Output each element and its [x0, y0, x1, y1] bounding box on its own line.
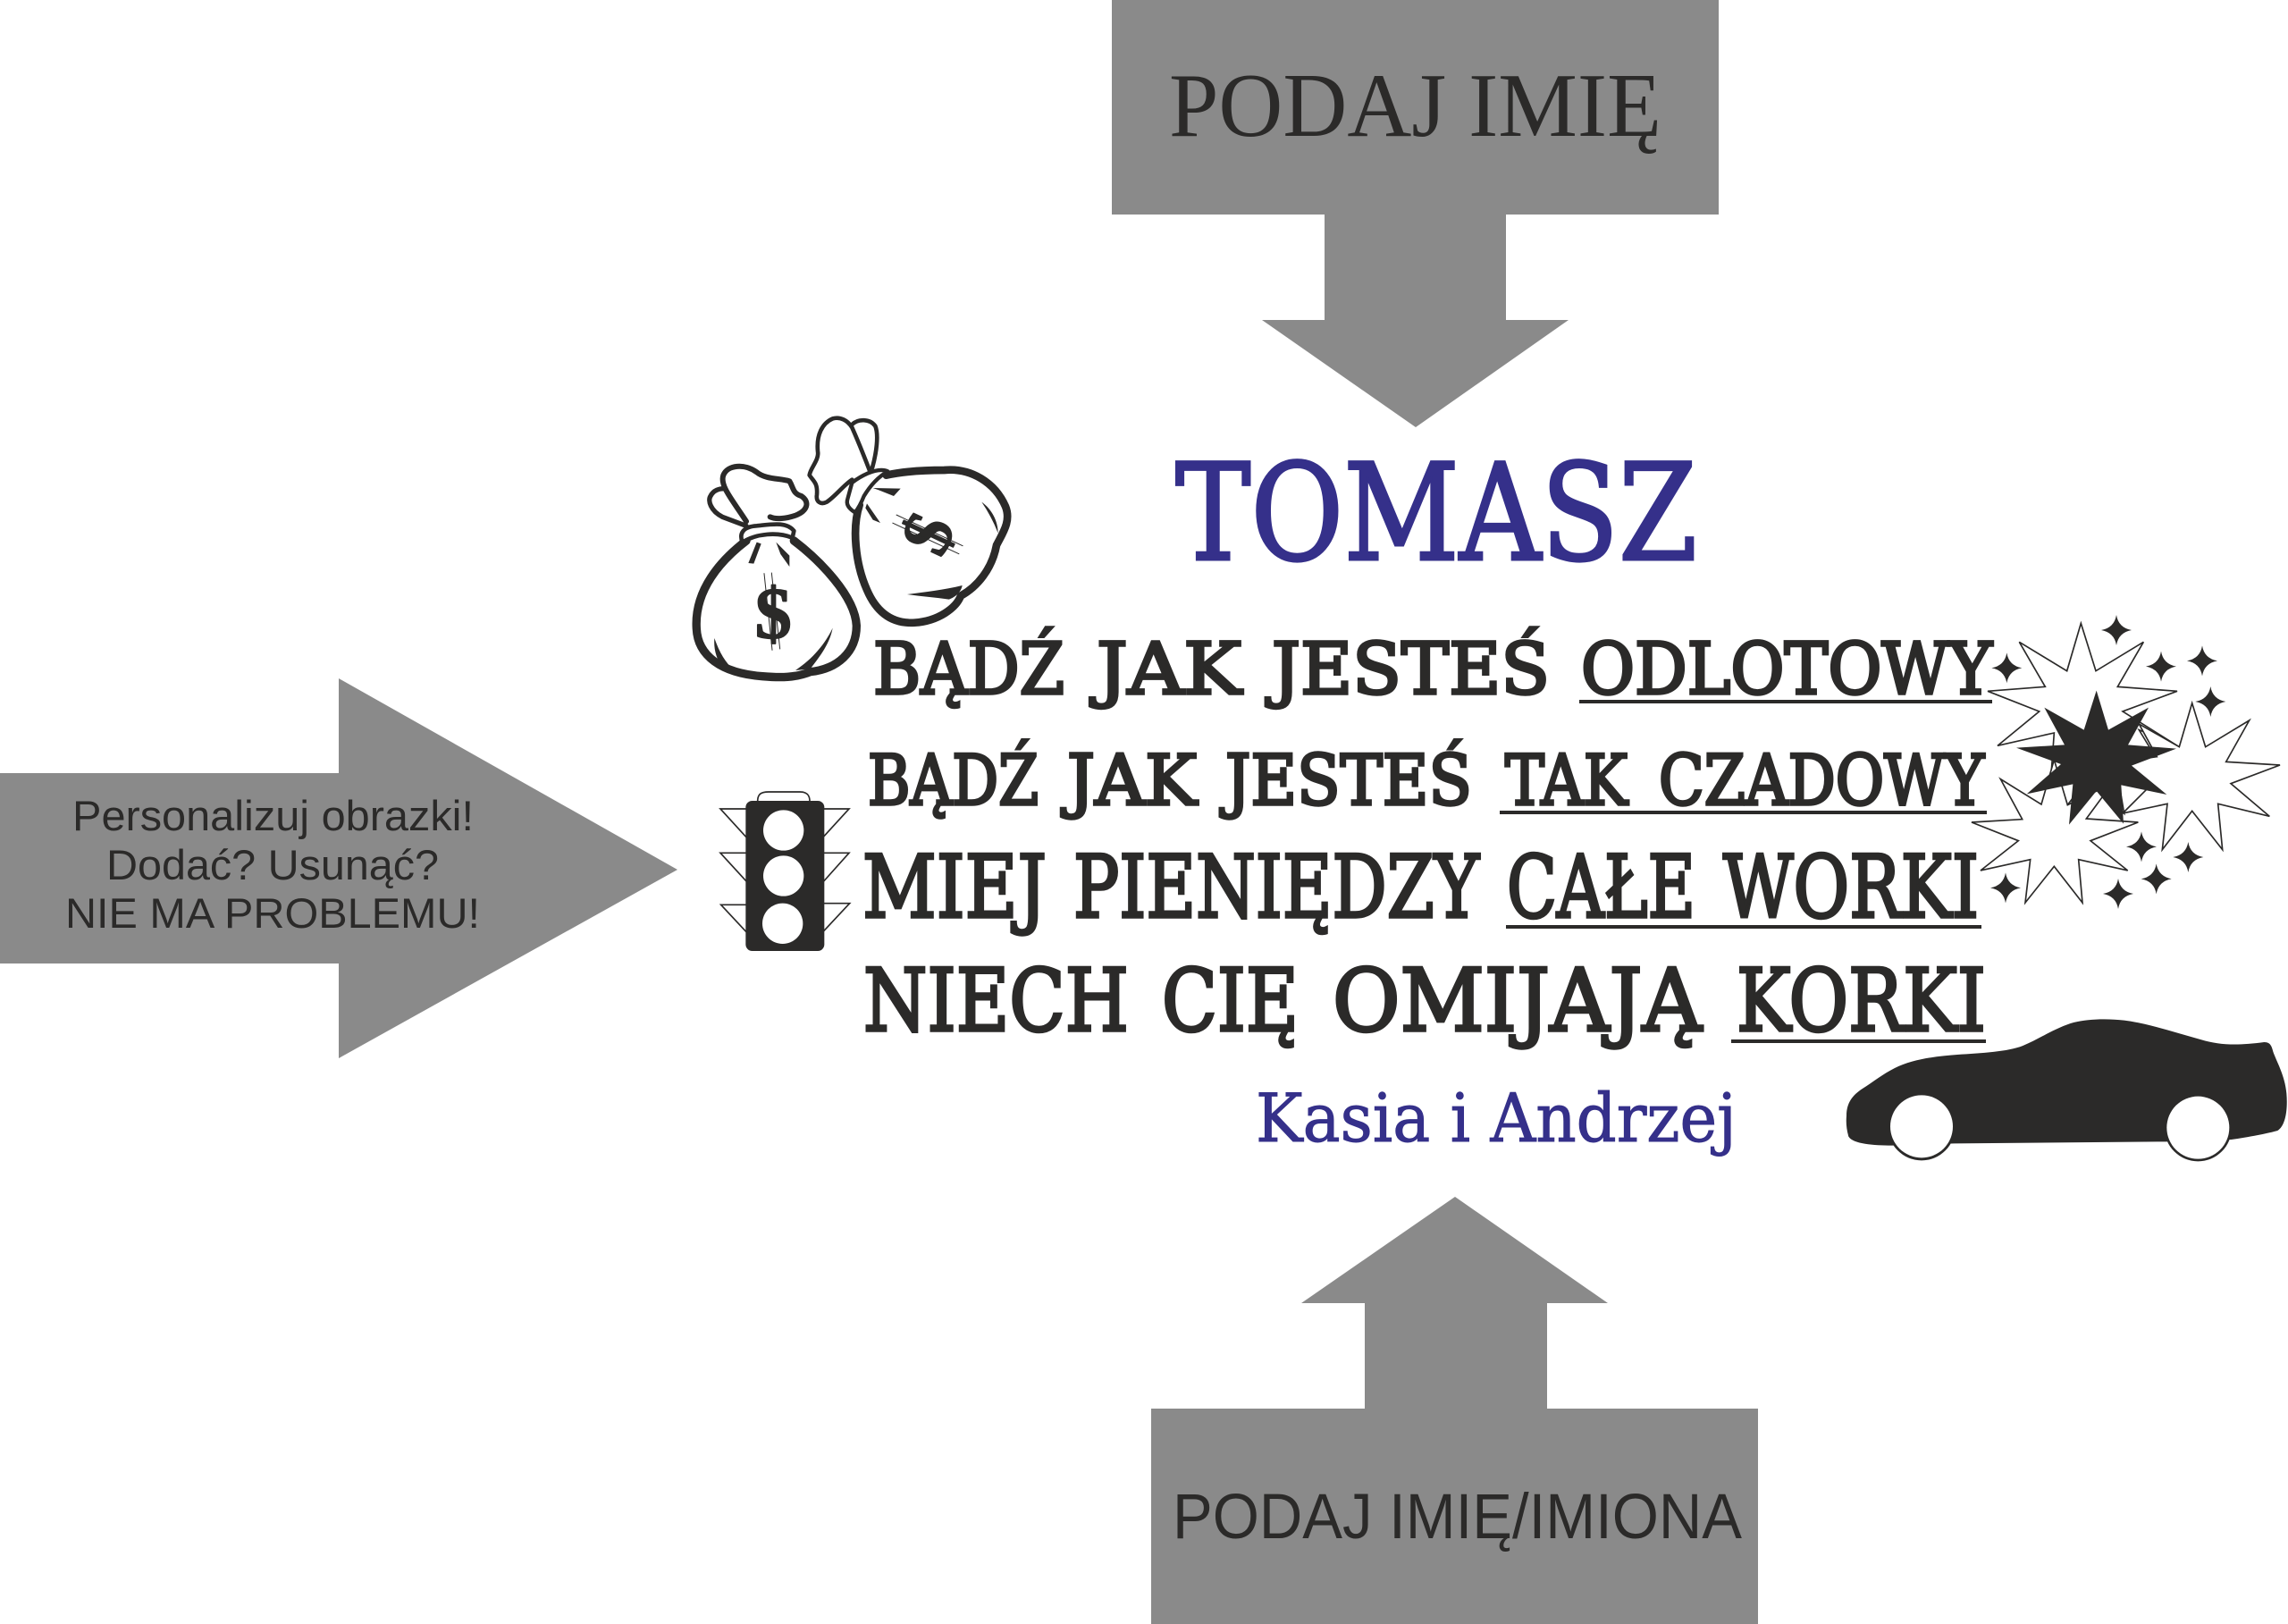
text block: personalize message: Personalizuj obrazki!: [72, 792, 474, 839]
signature: Kasia i Andrzej: Kasia i Andrzej: [1256, 1079, 1737, 1157]
verse line 4: OMIJAJĄ: [1333, 951, 1703, 1051]
verse line 2: JESTEŚ: [1220, 738, 1472, 821]
icon: money bags: $: [755, 572, 792, 653]
arrow: bottom input pointing up: [1151, 1197, 1758, 1624]
arrow: top input pointing down: [1112, 0, 1719, 427]
verse line 2: JAK: [1061, 741, 1199, 821]
verse line 3: PIENIĘDZY: [1073, 837, 1480, 938]
verse line 3: [862, 837, 1981, 938]
verse line 4: NIECH: [863, 951, 1129, 1051]
verse line 1: JAK: [1089, 627, 1242, 711]
verse line 1: BĄDŹ: [873, 627, 1064, 711]
heading: PODAJ IMIĘ/IMIONA: PODAJ IMIĘ/IMIONA: [1173, 1482, 1743, 1552]
verse line 2: CZADOWY: [1659, 741, 1985, 821]
text block: personalize message: Dodać? Usunąć?: [106, 841, 439, 888]
icon: bursts and sparkles: [1972, 615, 2280, 909]
verse line 4: CIĘ: [1162, 951, 1299, 1051]
verse line 1: JESTEŚ: [1266, 627, 1550, 711]
arrow: left pointing right: [0, 678, 677, 1058]
heading: PODAJ IMIĘ: PODAJ IMIĘ: [1169, 55, 1661, 156]
icon: car silhouette: [1846, 1019, 2287, 1161]
icon: traffic light: [720, 792, 850, 951]
icon: money bags: [696, 418, 1007, 677]
verse line 2: BĄDŹ: [868, 739, 1039, 821]
verse line 3: MIEJ: [862, 837, 1047, 938]
verse line 3: WORKI: [1723, 837, 1979, 938]
verse line 1: [873, 627, 1993, 711]
verse line 4: [863, 951, 1986, 1051]
verse line 2: TAK: [1505, 741, 1628, 821]
verse line 4: KORKI: [1737, 951, 1986, 1051]
verse line 1: ODLOTOWY: [1581, 627, 1993, 711]
text block: personalize message: [65, 792, 480, 937]
icon: money bags: $: [885, 501, 971, 566]
title: TOMASZ: TOMASZ: [1175, 436, 1697, 592]
text block: personalize message: NIE MA PROBLEMU!: [65, 889, 480, 937]
verse line 3: CAŁE: [1507, 837, 1695, 938]
verse line 2: [868, 738, 1987, 821]
